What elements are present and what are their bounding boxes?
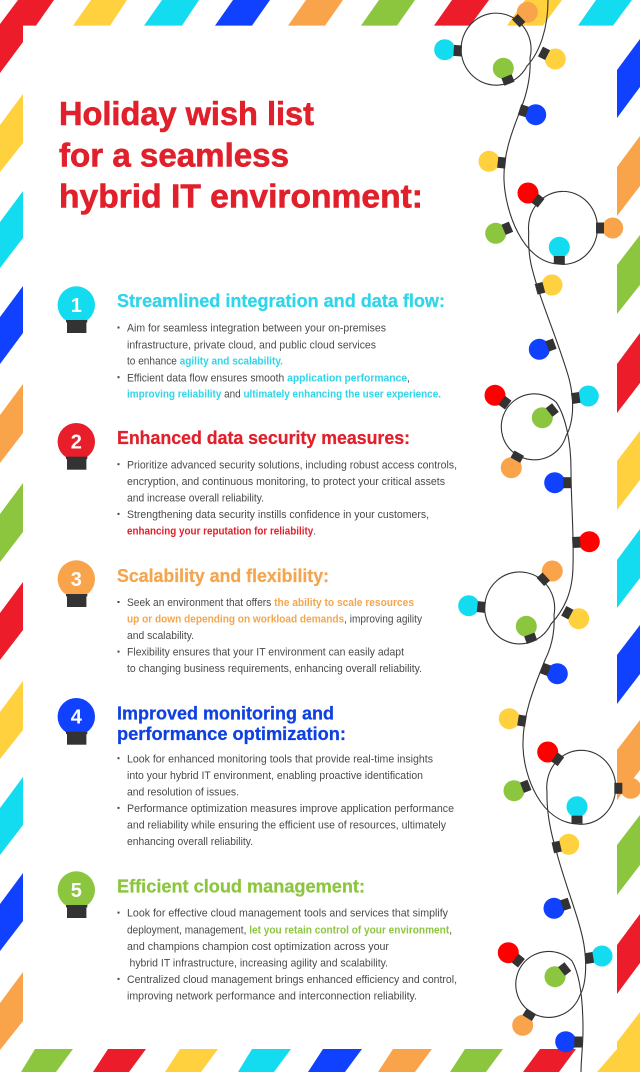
bullets 1: infrastructure, private cloud, and public cloud services	[127, 339, 376, 351]
bullets 2	[118, 459, 457, 537]
top border stripes	[0, 0, 632, 73]
heading 2: Enhanced data security measures:	[117, 427, 410, 448]
light string wire	[461, 0, 616, 1072]
heading 3: Scalability and flexibility:	[117, 565, 329, 586]
title: for a seamless	[59, 137, 289, 174]
string of holiday lights	[434, 0, 640, 1072]
bullets 5: and champions champion cost optimization across your	[127, 941, 389, 953]
heading 4: performance optimization:	[117, 723, 346, 744]
bullets 3	[118, 597, 423, 675]
heading 5: Efficient cloud management:	[117, 876, 365, 897]
bullets 1: Efficient data flow ensures smooth application performance,	[127, 372, 410, 384]
bullets 4: Performance optimization measures improve application performance	[127, 803, 454, 815]
section 2: data security	[58, 423, 457, 537]
icon: bulb 3: 3	[71, 569, 82, 591]
bullets 2: Prioritize advanced security solutions, including robust access controls,	[127, 459, 457, 471]
bullets 5: hybrid IT infrastructure, increasing agility and scalability.	[130, 957, 388, 969]
bullets 4: into your hybrid IT environment, enabling proactive identification	[127, 770, 423, 782]
bullets 2: Strengthening data security instills confidence in your customers,	[127, 509, 429, 521]
bottom border stripes	[21, 1012, 640, 1072]
bullets 5: deployment, management, let you retain control of your environment,	[127, 924, 452, 936]
bulbs	[434, 2, 640, 1052]
bullets 3: up or down depending on workload demands, improving agility	[127, 614, 423, 626]
bullets 4: and resolution of issues.	[127, 786, 239, 798]
bullets 2: encryption, and continuous monitoring, to protect your critical assets	[127, 476, 445, 488]
left border stripes	[0, 94, 23, 1050]
bullets 5: Centralized cloud management brings enhanced efficiency and control,	[127, 974, 457, 986]
icon: bulb 1	[58, 286, 95, 333]
bullets 5	[118, 908, 457, 1003]
bullets 1	[118, 323, 441, 401]
section 3: scalability	[58, 560, 423, 675]
bullets 2: enhancing your reputation for reliability.	[127, 525, 316, 537]
icon: bulb 2	[58, 423, 95, 470]
title: Holiday wish list	[59, 95, 314, 132]
section 5: cloud management	[58, 871, 457, 1003]
icon: bulb 4: 4	[71, 707, 83, 729]
icon: bulb 3	[58, 560, 95, 607]
icon: bulb 5	[58, 871, 95, 918]
icon: bulb 1: 1	[71, 295, 82, 317]
heading 4	[117, 702, 346, 744]
section 4: monitoring	[58, 698, 454, 848]
right border stripes	[617, 39, 640, 994]
bullets 3: and scalability.	[127, 630, 194, 642]
icon: bulb 4	[58, 698, 95, 745]
bullets 5: Look for effective cloud management tools and services that simplify	[127, 908, 449, 920]
heading 1: Streamlined integration and data flow:	[117, 290, 445, 311]
section 1: streamlined integration	[58, 286, 445, 401]
icon: bulb 2: 2	[71, 432, 82, 454]
title: hybrid IT environment:	[59, 177, 423, 214]
icon: bulb 5: 5	[71, 880, 82, 902]
bullets 4: Look for enhanced monitoring tools that provide real-time insights	[127, 753, 433, 765]
bullets 4: and reliability while ensuring the efficient use of resources, ultimately	[127, 819, 447, 831]
bullets 1: to enhance agility and scalability.	[127, 356, 283, 368]
bullets 5: improving network performance and interconnection reliability.	[127, 991, 417, 1003]
bullets 4	[118, 753, 454, 848]
bullets 3: Seek an environment that offers the ability to scale resources	[127, 597, 414, 609]
bullets 3: to changing business requirements, enhancing overall reliability.	[127, 663, 422, 675]
title	[59, 95, 423, 214]
heading 4: Improved monitoring and	[117, 702, 334, 723]
bullets 2: and increase overall reliability.	[127, 492, 264, 504]
bullets 1: Aim for seamless integration between your on-premises	[127, 323, 386, 335]
bullets 4: enhancing overall reliability.	[127, 836, 253, 848]
bullets 3: Flexibility ensures that your IT environment can easily adapt	[127, 647, 404, 659]
bullets 1: improving reliability and ultimately enhancing the user experience.	[127, 389, 441, 401]
